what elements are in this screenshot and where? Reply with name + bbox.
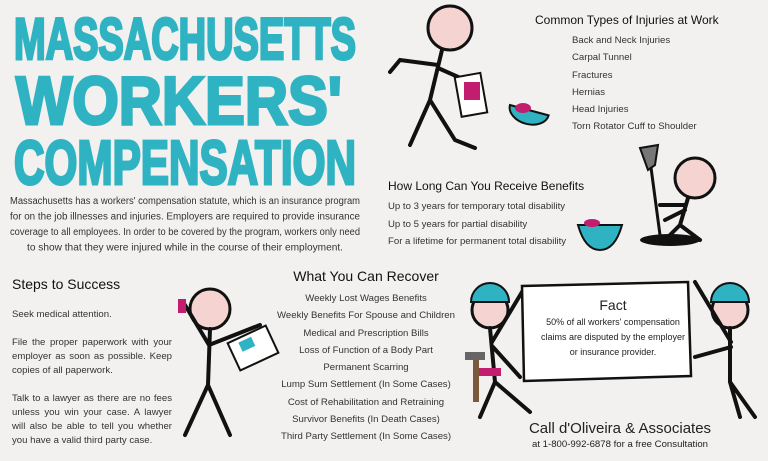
intro paragraph: coverage to all employees. In order to be covered by the program, workers only need [10, 227, 360, 238]
steps text: File the proper paperwork with your employer as soon as possible. Keep copies of all paperwork. [12, 337, 172, 376]
figure: two workers holding fact sign [465, 280, 758, 420]
benefits duration list [388, 201, 566, 247]
fact text: 50% of all workers' compensation claims are disputed by the employer or insurance provider. [541, 317, 685, 357]
injuries list: Head Injuries [572, 104, 629, 115]
injuries list: Back and Neck Injuries [572, 35, 670, 46]
steps text: Seek medical attention. [12, 309, 112, 320]
recover list: Cost of Rehabilitation and Retraining [288, 397, 444, 408]
heading: steps to success: Steps to Success [12, 276, 120, 292]
intro paragraph [10, 196, 361, 254]
fact text: Fact [599, 297, 627, 313]
recover list: Loss of Function of a Body Part [299, 345, 433, 356]
figure: worker with paint bucket [388, 4, 550, 150]
title [14, 7, 356, 195]
injuries list [572, 35, 697, 132]
heading: how long: How Long Can You Receive Benefits [388, 179, 584, 193]
heading: what you can recover: What You Can Recover [293, 268, 439, 284]
benefits duration list: For a lifetime for permanent total disability [388, 236, 566, 247]
steps text: Talk to a lawyer as there are no fees unless you win your case. A lawyer will also be able to tell you whether you have a valid third party case. [12, 393, 172, 446]
recover list: Third Party Settlement (In Some Cases) [281, 431, 451, 442]
figure: worker with shovel [576, 144, 716, 251]
intro paragraph: Massachusetts has a workers' compensation statute, which is an insurance program [10, 196, 360, 207]
intro paragraph: for on the job illnesses and injuries. Employers are required to provide insurance [10, 212, 361, 222]
call to action: Call d'Oliveira & Associates [529, 420, 711, 437]
recover list: Permanent Scarring [323, 362, 409, 373]
benefits duration list: Up to 3 years for temporary total disability [388, 201, 565, 212]
fact sign [520, 280, 692, 382]
injuries list: Carpal Tunnel [572, 52, 632, 63]
call to action [529, 420, 711, 450]
fact text [541, 297, 685, 357]
benefits duration list: Up to 5 years for partial disability [388, 218, 527, 230]
recover list: Survivor Benefits (In Death Cases) [292, 414, 440, 425]
recover list: Weekly Lost Wages Benefits [305, 293, 427, 304]
intro paragraph: to show that they were injured while in the course of their employment. [27, 242, 343, 254]
recover list: Medical and Prescription Bills [303, 328, 429, 339]
steps text [12, 309, 172, 446]
figure: worker with clipboard [178, 288, 280, 438]
injuries list: Fractures [572, 70, 613, 81]
recover list: Weekly Benefits For Spouse and Children [277, 310, 455, 321]
recover list: Lump Sum Settlement (In Some Cases) [281, 379, 451, 390]
injuries list: Torn Rotator Cuff to Shoulder [572, 121, 697, 132]
heading: common injuries: Common Types of Injuries at Work [535, 13, 719, 27]
injuries list: Hernias [572, 87, 605, 98]
call to action: at 1-800-992-6878 for a free Consultation [532, 439, 708, 450]
recover list [277, 293, 455, 442]
